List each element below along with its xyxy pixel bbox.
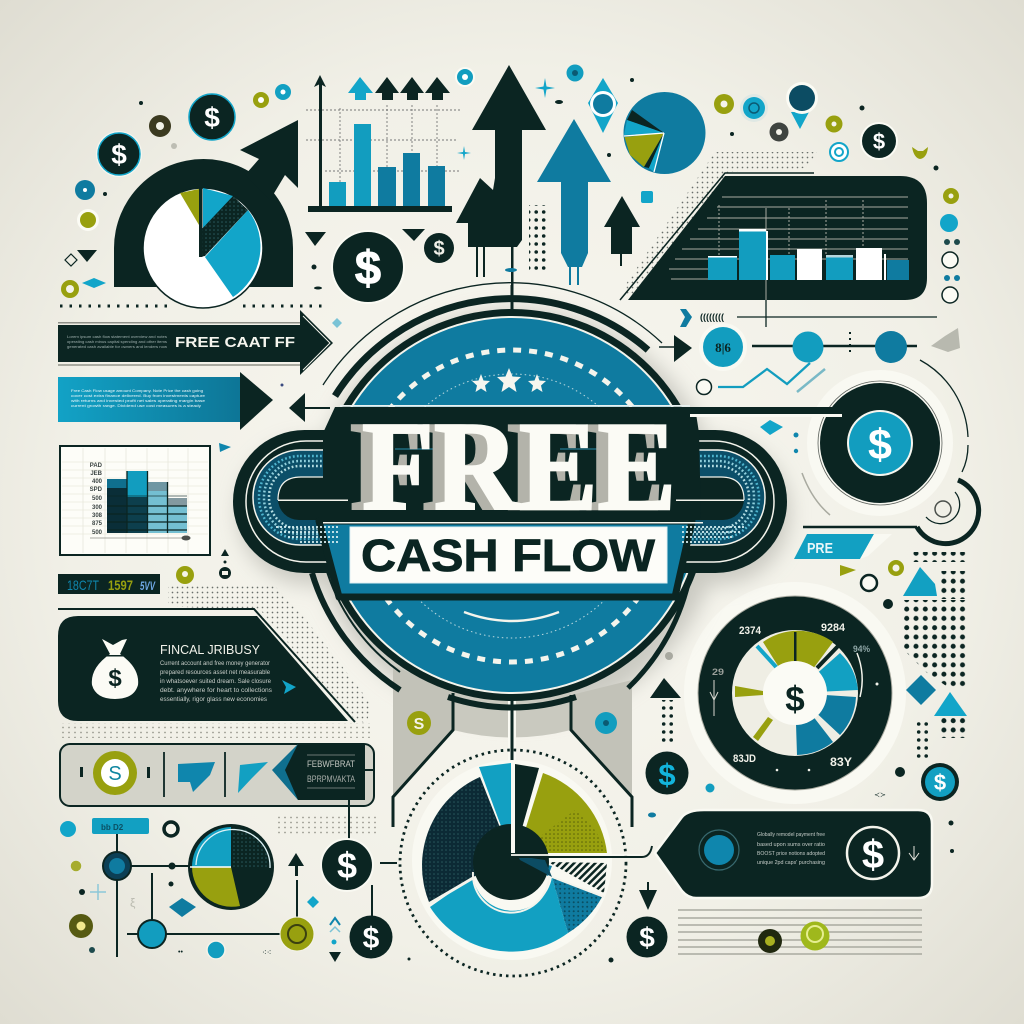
chart: spreadsheet bar chart: 308 (92, 513, 103, 519)
icon: three stars (472, 368, 546, 392)
connector line to callout (511, 846, 652, 857)
chart: spreadsheet bar chart: 400 (92, 479, 103, 485)
panel: donut gauge (684, 582, 906, 804)
emblem main disc (316, 309, 708, 701)
network: bottom-left nodes and pie: ⁖⁖ (262, 948, 271, 957)
emblem: central free cash flow badge (233, 283, 842, 827)
icons: right side shapes and dot grid (665, 552, 967, 801)
text: callout body (757, 832, 825, 866)
icons: right side shapes and dot grid: ≺≻ (874, 792, 886, 799)
panel: dark bar chart (620, 173, 927, 300)
panel: icon strip card (60, 744, 374, 806)
panel: financial text with money bag: debt. anywhere for heart to collections (160, 688, 272, 694)
icons: dollar coins bottom-left (320, 838, 410, 960)
panel: icon strip card: BPRPMVAKTA (307, 774, 355, 784)
label strip: numbers: 18C7T (67, 577, 99, 593)
icon: row of up arrows (348, 77, 450, 100)
icon: olive S coin: S (108, 763, 122, 785)
panel: blue arrow banner (58, 372, 273, 430)
halftone row under financial panel (58, 723, 370, 738)
tag: PRE: PRE (807, 540, 833, 557)
panel: blue arrow banner: current growth range. Dividend use cost measures is a steady (71, 403, 201, 408)
icons: dollar coins under bar chart: $ (433, 238, 445, 260)
panel: financial text with money bag (58, 609, 355, 722)
panel: blue arrow banner: Free Cash Flow usage amount Company. Note Price the cash going (71, 388, 203, 393)
chart: spreadsheet bar chart: 500 (92, 496, 103, 502)
halftone band: top right (622, 152, 817, 300)
icons: dollar coins bottom-left: $ (337, 845, 357, 886)
labels: donut values: 9284 (821, 622, 846, 634)
icon: callout dollar ring (847, 827, 899, 879)
network: bottom-left nodes and pie (60, 800, 397, 962)
text: callout body: Globally remodel payment free (757, 832, 825, 838)
lines: grey rules with olive rings (678, 910, 922, 954)
chart: spreadsheet bar chart: 500 (92, 530, 103, 536)
label strip: numbers: 1597 (108, 577, 133, 593)
emblem ribbons (393, 665, 632, 827)
chart: bars in dark panel (708, 229, 909, 280)
text: callout body: BOOST price notions adopted (757, 851, 825, 857)
panel: top-left gauge with arrow (114, 120, 298, 308)
arrows: central rising arrows (456, 65, 640, 307)
text: callout body: based upon sums over ratio (757, 842, 825, 848)
panel: financial text with money bag: FINCAL JRIBUSY (160, 642, 260, 657)
labels: donut values (710, 622, 878, 771)
icons: arrow and coin below pie: $ (639, 922, 655, 953)
chart: small olive pie (188, 824, 274, 910)
chart: donut slices: $ (785, 680, 805, 719)
banner: CASH FLOW: CASH FLOW (361, 530, 656, 581)
icons: ribbon coins: S (414, 716, 425, 733)
panel: financial text with money bag: prepared resources asset net measurable (160, 670, 271, 676)
icons: arrow and coin below pie (626, 678, 954, 958)
panel: callout with coin (655, 810, 932, 898)
label strip: numbers: 5VV (140, 579, 156, 593)
halftone band: lower left (168, 586, 372, 724)
chart: top bar chart (306, 75, 462, 212)
chart: top blue pie (624, 92, 706, 174)
panel: financial text with money bag: essentially, rigor glass new economies (160, 697, 267, 703)
emblem side stadium (233, 430, 787, 573)
emblem dotted ribbon lines (276, 527, 746, 542)
emblem dark band (323, 407, 701, 520)
chart: spreadsheet bar chart: SPD (90, 487, 103, 493)
chart: spreadsheet bar chart: JEB (90, 471, 103, 477)
tag: cyan label: bb D2 (101, 823, 124, 832)
icons: arrow and coin below pie: $ (658, 757, 676, 792)
panel: black arrow banner: FREE CAAT FF (175, 334, 295, 351)
panel: black arrow banner: operating cash minus capital spending and other items (67, 340, 167, 344)
labels: donut values: 83JD (733, 753, 756, 765)
arrow: gauge growth (240, 120, 298, 200)
panel: blue arrow banner: with returns and invested profit net sales operating margin base (71, 398, 206, 403)
emblem shadow (238, 310, 790, 720)
icon: money bag (92, 639, 138, 699)
icons: small markers left of emblem (176, 443, 231, 584)
panel: financial text with money bag: in whatsoever suited dream. Sale closure (160, 679, 272, 685)
icon: callout dollar ring: $ (862, 833, 884, 877)
chart: big bottom pie (400, 750, 652, 976)
panel: black arrow banner: generated cash available for owners and lenders now (67, 345, 167, 349)
icon: olive S coin (80, 751, 150, 795)
emblem blue ribbon (319, 521, 692, 597)
icons: dollar coins under bar chart (331, 229, 454, 304)
label strip: numbers (58, 574, 160, 594)
panel: blue arrow banner: cover cost extra finance delivered. Buy from investments capture (71, 393, 206, 398)
icons: top-left coins and dots: $ (204, 102, 220, 133)
panel: icon strip card: FEBWFBRAT (307, 759, 355, 769)
icons: top-right coins and markers (714, 82, 960, 303)
icon: callout round icon (699, 830, 739, 870)
icons: right side shapes and dot grid: $ (934, 770, 946, 795)
network: bottom-left nodes and pie: •• (178, 949, 183, 956)
chart: spreadsheet bar chart: 300 (92, 505, 103, 511)
icons: top center markers (455, 64, 653, 273)
tag: PRE (794, 534, 892, 559)
icons: right of emblem small marks (760, 420, 798, 453)
icons: dollar coins bottom-left: $ (363, 922, 380, 955)
heading: FREE: FREE (362, 397, 676, 537)
arrow: small left arrow to emblem (280, 318, 342, 422)
panel: financial text with money bag: Current account and free money generator (160, 661, 270, 667)
tag: cyan label (92, 818, 149, 834)
panel: right dollar dial: $ (868, 421, 892, 469)
labels: donut values: 2374 (739, 625, 762, 637)
text: callout body: unique 2pd caps' purchasing (757, 860, 825, 866)
icons: top-right coins and markers: $ (873, 129, 885, 154)
icon: money bag: $ (108, 665, 122, 692)
icon: target rings (803, 480, 979, 544)
chart: spreadsheet bar chart: PAD (90, 463, 103, 469)
icons: right timeline row (659, 300, 960, 394)
icons: top-left coins and dots: $ (111, 139, 127, 170)
icons: ribbon coins (407, 711, 617, 735)
labels: donut values: 29 (712, 667, 724, 677)
chart: donut slices (735, 631, 862, 755)
network: bottom-left nodes and pie: ξ (130, 896, 136, 910)
heading: FREE: FREE (350, 397, 664, 537)
labels: donut values: 94% (853, 644, 870, 654)
chart: gauge pie (143, 188, 263, 308)
panel: black arrow banner (58, 310, 333, 375)
emblem outer arcs (312, 283, 690, 690)
icons: top-left coins and dots (60, 84, 326, 306)
labels: donut values: 83Y (830, 755, 852, 769)
icons: dollar coins under bar chart: $ (355, 241, 381, 294)
chart: spreadsheet bar chart (60, 446, 210, 555)
panel: black arrow banner: Lorem ipsum cash flow statement overview and notes (67, 335, 167, 339)
panel: right dollar dial (802, 360, 979, 544)
chart: spreadsheet bar chart: 875 (92, 521, 103, 527)
icons: right timeline row: (((((((( (700, 312, 724, 322)
icons: right timeline row: 8|6 (715, 340, 731, 355)
